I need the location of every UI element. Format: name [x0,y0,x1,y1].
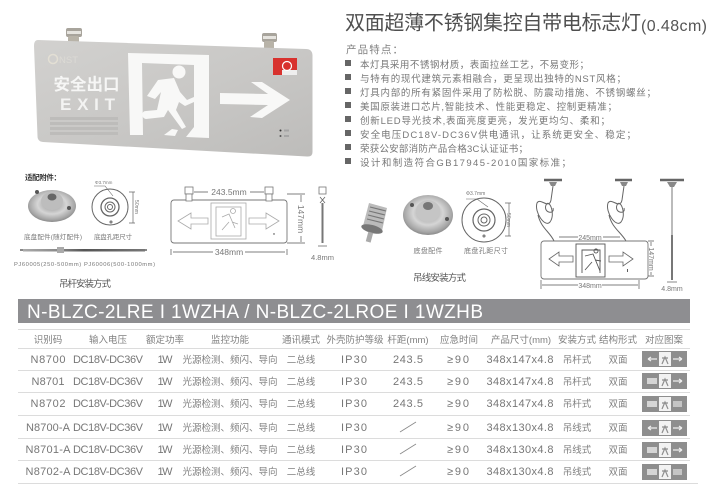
table title bar [18,299,690,323]
row N8700 [30,351,687,367]
feature list: 本灯具采用不锈钢材质，表面拉丝工艺，不易变形； [360,59,589,71]
row N8700: 243.5 [393,354,423,366]
row N8702: 光源检测、频闪、导向 [182,398,278,410]
row N8701: 吊杆式 [563,376,592,388]
row N8701-A: DC18V-DC36V [73,444,144,456]
dimension: 348mm: 348mm [215,247,243,257]
feature list [345,59,656,169]
row N8700-A: 348x130x4.8 [486,422,554,434]
dimension: 245mm: 245mm [578,235,602,242]
certification label [273,58,297,75]
right arrow outline [609,252,633,266]
pattern icon [642,464,687,480]
row N8702-A [26,464,687,480]
row N8702: 双面 [608,399,628,410]
row N8702 [30,396,687,412]
title: 双面超薄不锈钢集控自带电标志灯 [345,12,641,34]
row N8700: DC18V-DC36V [73,354,144,366]
pattern icon [642,420,687,436]
row N8700: 二总线 [287,354,316,366]
table header: 结构形式 [599,334,637,346]
wire dimension drawing front [536,180,654,290]
row N8702: DC18V-DC36V [73,398,144,410]
features heading: 产品特点： [346,43,403,56]
row N8701-A: 348x130x4.8 [486,444,554,456]
sign outline [541,241,648,279]
specification table [18,330,698,484]
row N8701-A: 双面 [608,445,628,456]
rod side view: 4.8mm [311,253,334,262]
row N8700-A: 吊线式 [563,422,592,434]
rod dimension drawing front [171,187,306,257]
icon: hole size drawing: Φ3.7mm [95,180,113,185]
indicator lights [280,130,289,137]
row N8701: 光源检测、频闪、导向 [182,376,278,388]
feature list: 美国原装进口芯片,智能技术、性能更稳定、控制更精准； [360,101,617,113]
table header [34,334,683,346]
row N8702-A: 二总线 [287,466,316,478]
rod side view [311,187,334,262]
brand logo: NST [59,55,78,66]
sign outline [171,200,287,243]
hole size label: 底盘孔距尺寸 [464,246,508,255]
running man door symbol [128,53,209,138]
row N8700-A: ≥90 [447,422,469,434]
row N8701-A: IP30 [341,444,367,456]
icon: left hanging clip [66,28,82,47]
row N8702-A: ≥90 [447,466,469,478]
table header: 监控功能 [211,334,249,346]
dimension: 147mm: 147mm [296,205,306,233]
icon: wire connector photo [360,203,387,243]
row N8701: ≥90 [447,376,469,388]
left arrow outline [178,213,208,229]
row N8702: N8702 [30,398,66,410]
row N8702-A: 348x130x4.8 [486,466,554,478]
row N8702: 二总线 [287,398,316,410]
table header: 产品尺寸(mm) [491,334,551,346]
row N8700-A: 1W [158,422,173,434]
icon: hanging rod [20,247,147,253]
row N8702: ≥90 [447,398,469,410]
row N8702: 348x147x4.8 [486,398,554,410]
row N8701-A: ≥90 [447,444,469,456]
row N8700-A: 双面 [608,423,628,434]
sign text: safety exit Chinese: 安全出口 [54,74,120,94]
sign plate [34,40,312,157]
pattern icon [642,396,687,412]
row N8700: ≥90 [447,354,469,366]
brand logo [48,54,78,66]
row N8702-A: DC18V-DC36V [73,466,144,478]
door figure [576,244,605,277]
icon: hole size drawing [92,180,139,225]
rod model labels: PJ60005(250-500mm) PJ60006(500-1000mm) [14,262,155,268]
row N8701: IP30 [341,376,367,388]
row N8700: 1W [158,354,173,366]
row N8702-A: N8702-A [26,466,71,478]
row N8702: IP30 [341,398,367,410]
left arrow outline [549,252,573,266]
clips [185,187,273,201]
row N8700: 吊杆式 [563,354,592,366]
row N8702-A: 双面 [608,467,628,478]
icon: hole size drawing: 50mm [133,200,139,214]
row N8701-A [26,442,687,458]
door figure [211,203,246,239]
row N8700-A: 二总线 [287,422,316,434]
pattern icon [642,373,687,389]
icon: base plate photo [403,195,453,235]
row N8700-A: IP30 [341,422,367,434]
icon: hole size drawing: 50mm [505,213,511,227]
accessories heading: 适配附件： [25,172,61,182]
table header: 对应图案 [645,334,683,346]
row N8701: 1W [158,376,173,388]
feature list: 荣获公安部消防产品合格3C认证证书； [360,143,528,155]
dimension: 348mm: 348mm [578,283,602,290]
row N8701-A: N8701-A [26,444,71,456]
row N8702-A: 吊线式 [563,466,592,478]
wire side view [660,180,684,293]
ceiling bases and wires [536,180,632,241]
icon: hole size drawing [462,191,511,242]
feature list: 灯具内部的所有紧固件采用了防松脱、防震动措施、不锈钢螺丝； [360,87,656,99]
row N8701: 243.5 [393,376,423,388]
product photo: stainless exit sign [34,28,312,157]
row N8700-A: 光源检测、频闪、导向 [182,422,278,434]
row N8702: 1W [158,398,173,410]
feature list: 设计和制造符合GB17945-2010国家标准； [360,157,571,169]
row N8701: N8701 [32,376,64,388]
dimension: 147mm: 147mm [647,247,654,271]
icon: base plate photo [28,190,76,222]
row N8700-A: N8700-A [26,422,71,434]
wire side view: 4.8mm [661,286,683,293]
table header: 通讯模式 [282,334,320,346]
row N8701 [32,373,687,389]
hole size label: 底盘孔距尺寸 [94,232,132,241]
row N8702-A: 光源检测、频闪、导向 [182,466,278,478]
feature list: 安全电压DC18V-DC36V供电通讯，让系统更安全、稳定； [360,129,636,141]
row N8701-A: 1W [158,444,173,456]
icon: right hanging clip [262,33,277,54]
table header: 杆距(mm) [387,334,429,346]
row N8701: DC18V-DC36V [73,376,144,388]
base plate label: 底盘配件(随灯配件) [24,232,82,241]
row N8701-A: 光源检测、频闪、导向 [182,444,278,456]
row N8701-A: 二总线 [287,444,316,456]
row N8700-A [26,420,687,436]
engraved small text [50,117,118,135]
table header: 识别码 [34,335,62,346]
feature list: 与特有的现代建筑元素相融合，更呈现出独特的NST风格； [360,73,626,85]
row N8701-A: 吊线式 [563,444,592,456]
row N8702: 吊杆式 [563,398,592,410]
row N8701: 348x147x4.8 [486,376,554,388]
table header: 额定功率 [146,334,184,346]
row N8702-A: 1W [158,466,173,478]
table header: 输入电压 [89,334,127,346]
pattern icon [642,442,687,458]
table header: 外壳防护等级 [326,334,384,346]
arrow [220,82,290,118]
table header: 应急时间 [440,334,478,346]
panel: rod installation [14,172,334,290]
table header: 安装方式 [558,334,596,346]
right arrow outline [249,213,279,229]
table title bar: N-BLZC-2LRE I 1WZHA / N-BLZC-2LROE I 1WZHB [27,302,483,323]
rod install caption: 吊杆安装方式 [59,278,111,290]
row N8702-A: IP30 [341,466,367,478]
icon: hole size drawing: Φ3.7mm [466,191,485,197]
dimension: 243.5mm: 243.5mm [211,187,247,197]
panel: wire installation [360,180,684,293]
row N8700: 348x147x4.8 [486,354,554,366]
row N8700: IP30 [341,354,367,366]
base plate label: 底盘配件 [414,246,442,255]
row N8702: 243.5 [393,398,423,410]
row N8701: 双面 [608,377,628,388]
row N8701: 二总线 [287,376,316,388]
feature list: 创新LED导光技术,表面亮度更亮，发光更均匀、柔和； [360,115,610,127]
pattern icon [642,351,687,367]
row N8700: N8700 [30,354,66,366]
row N8700-A: DC18V-DC36V [73,422,144,434]
title: (0.48cm) [641,18,707,35]
sign text: EXIT: EXIT [60,95,116,114]
row N8700: 光源检测、频闪、导向 [182,354,278,366]
row N8700: 双面 [608,355,628,366]
wire install caption: 吊线安装方式 [413,272,466,284]
